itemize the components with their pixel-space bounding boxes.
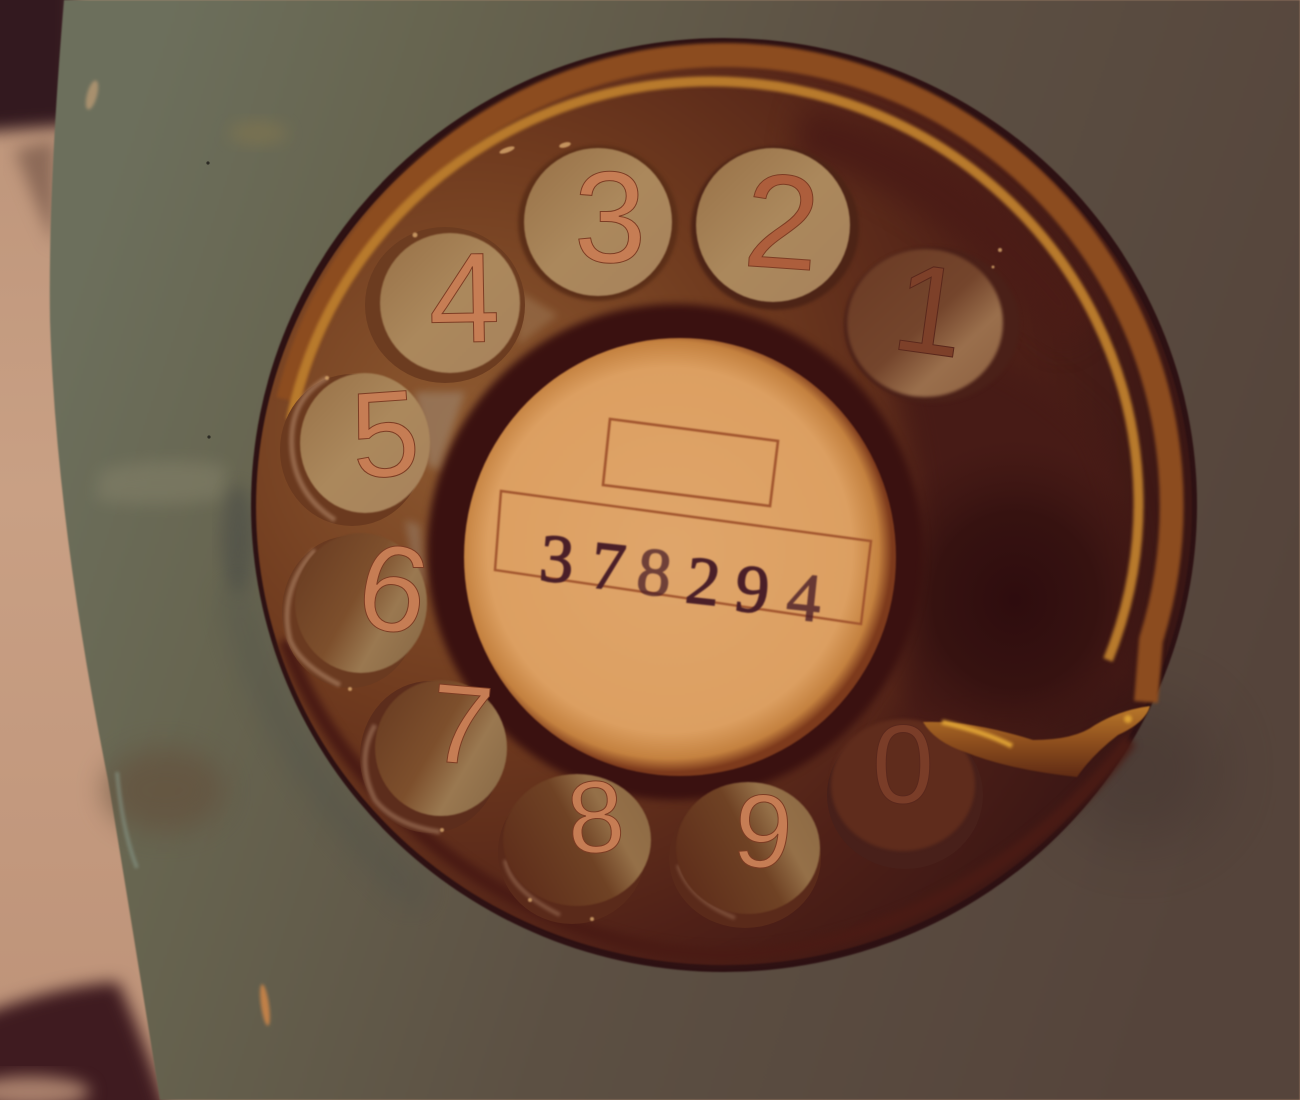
finger hole 8: 8 [563,758,628,876]
background: dark shape top left [0,0,75,132]
shadow on left of dial [222,485,254,595]
spot reflection bottom [258,984,272,1026]
shadow below left of dial [235,590,420,900]
center dark ring [427,304,923,800]
darker lower right of plate [865,440,1165,760]
finger hole 9: 9 [729,772,797,892]
finger hole 3 [518,144,678,301]
finger hole 6: 6 [348,516,439,661]
light wedge between holes 5 and 6 [405,520,425,590]
dust spot two [207,435,211,439]
dark upper band between rim and holes [800,130,1080,330]
finger hole 3: 3 [574,144,646,290]
finger stop highlight [942,722,1012,746]
center label [464,338,896,776]
lower plate rim [285,640,1130,955]
finger hole 0 [827,702,983,869]
telephone number: 4 [783,557,825,636]
finger hole 7 [360,660,507,833]
warm reflection top [228,121,288,145]
dial [251,38,1197,972]
spot reflection top [83,79,101,111]
telephone number: 7 [587,526,629,605]
dial shadow on body, lower right [1060,695,1220,845]
background: light patch bottom left [0,1076,90,1100]
telephone number: 2 [682,541,724,620]
number label box [495,491,871,624]
telephone number: 8 [633,532,675,611]
light wedge between holes 4 and 5 [415,392,465,470]
phone body warm reflection lower left [105,748,225,832]
finger hole 4: 4 [427,226,501,371]
dial outer rim [251,38,1197,972]
background: dark shape bottom left [0,982,170,1100]
finger hole 2: 2 [740,146,825,300]
phone body reflection band [95,461,225,505]
light wedge between holes 3 and 4 [518,292,558,345]
gold highlight rim band [291,81,1139,660]
finger hole 0: 0 [872,702,934,827]
label disc [464,338,896,776]
finger hole 1: 1 [886,235,975,385]
dust spot one [206,161,210,165]
dark right side of plate [880,330,1135,760]
phone body edge highlight [117,772,137,868]
finger stop arm [923,706,1150,777]
finger hole 2 [691,146,859,310]
outer copper rim band [288,55,1172,702]
upper label box [603,419,778,506]
telephone number: 3 [537,519,577,598]
specular highlights on glass [325,141,1002,921]
finger hole 6 [282,516,439,688]
telephone number [537,519,825,636]
finger hole 7: 7 [425,660,498,790]
finger hole 4 [365,226,525,383]
finger hole 8 [498,758,651,924]
dial plate [256,49,1192,965]
finger hole 5 [280,364,430,526]
finger stop tip highlight [1124,715,1132,723]
finger hole 1 [844,235,1020,403]
telephone number: 9 [731,549,773,628]
finger hole 5: 5 [346,364,424,504]
background: shadow patch upper left [15,140,55,245]
finger hole 9 [669,772,821,928]
finger stop [923,706,1150,777]
